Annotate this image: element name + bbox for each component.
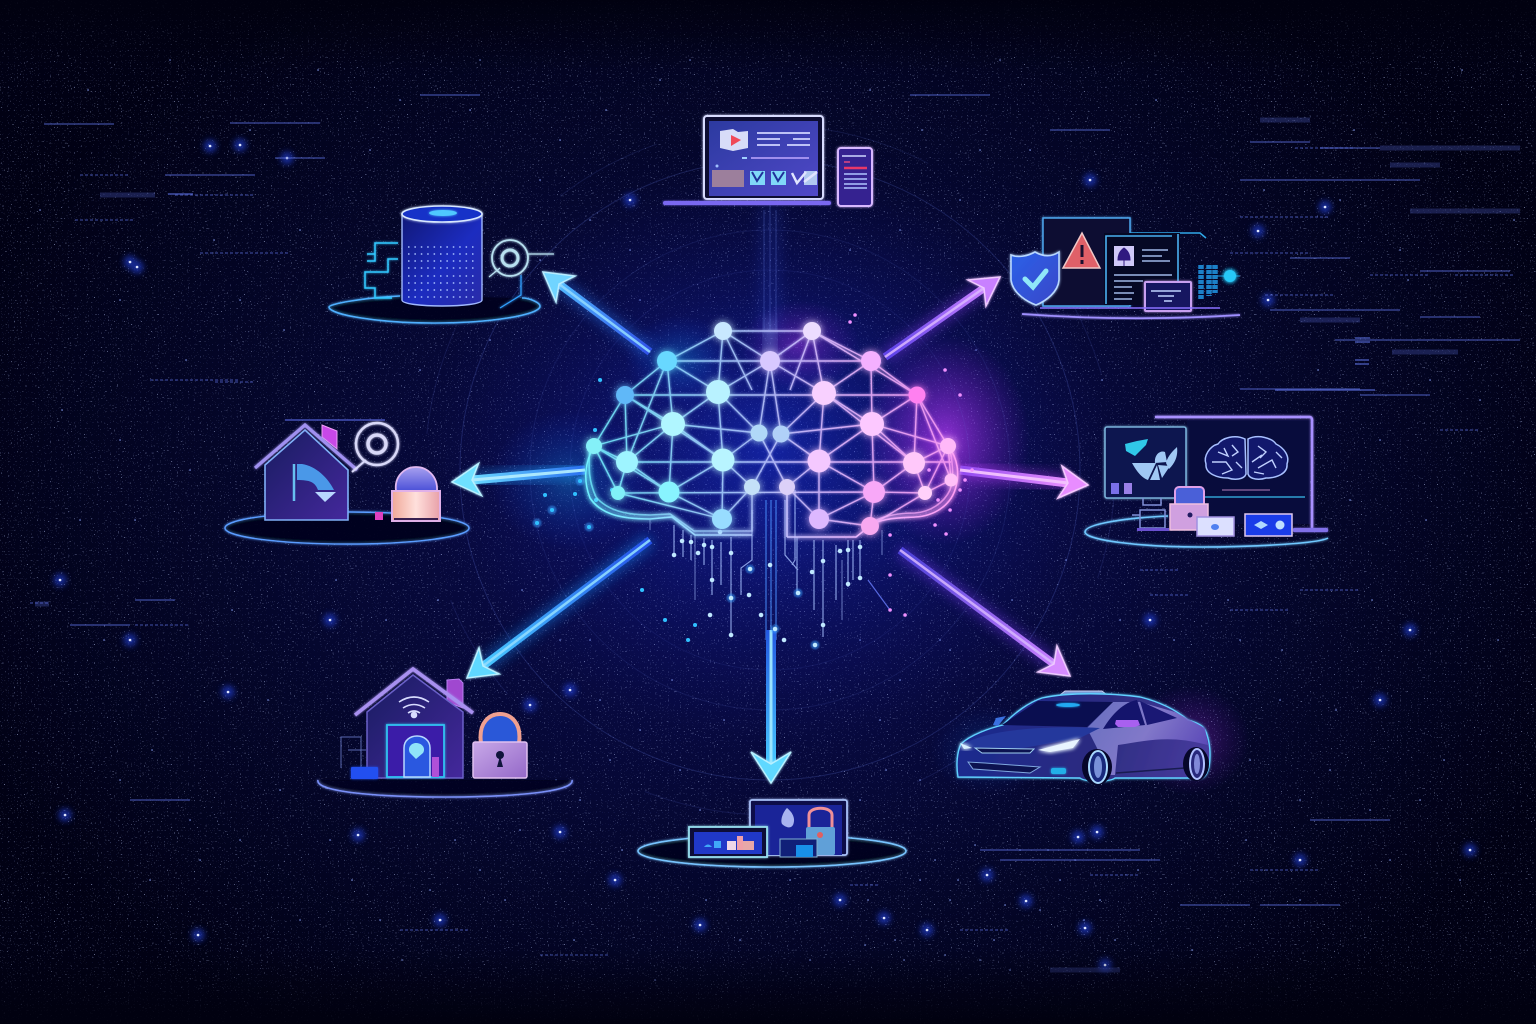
chimney: [322, 425, 337, 449]
brain scan: [1205, 437, 1288, 479]
speaker grille: [408, 247, 475, 297]
platform: [318, 780, 572, 797]
icon: security dashboard: [1011, 218, 1240, 318]
video tile: [720, 129, 748, 151]
padlock: [809, 808, 832, 828]
brain network: [586, 322, 958, 537]
lock: [396, 467, 437, 491]
brain outline: [586, 446, 958, 537]
big monitor: [1187, 420, 1310, 524]
side panel highlight: [1087, 702, 1208, 775]
platform: [225, 512, 469, 544]
arrow: to bottom devices: [751, 500, 791, 783]
orbit rings: [425, 125, 1115, 815]
circuit traces: [365, 243, 398, 298]
icon: car: [940, 691, 1250, 789]
icon: analytics screens: [1085, 417, 1328, 547]
outline boxes: [341, 737, 366, 768]
small cards: [1197, 517, 1234, 536]
brain circuit drips: [650, 490, 890, 637]
back panel: [1043, 218, 1130, 306]
padlock: [481, 714, 519, 743]
phone: [838, 148, 872, 206]
side windows: [1103, 700, 1145, 729]
large screen: [750, 800, 847, 855]
arrow: to secured home: [467, 540, 650, 678]
target sensor: [352, 423, 398, 472]
wheels: [1082, 749, 1112, 785]
windshield: [1002, 701, 1113, 727]
image tile and checks: [712, 170, 744, 187]
shield: [1011, 252, 1059, 305]
warning triangle: [1063, 233, 1100, 268]
text lines: [757, 133, 810, 145]
icon: smart home with lock: [225, 420, 469, 544]
icon: secured house: [318, 669, 572, 797]
laptop base: [663, 201, 831, 205]
neurons: [586, 322, 958, 535]
status dot: [1217, 275, 1240, 277]
target sensor: [489, 240, 554, 308]
arrow: to analytics screens: [960, 466, 1088, 498]
stand and base: [1132, 498, 1165, 528]
small card: [1145, 282, 1191, 311]
lock: [1175, 487, 1204, 507]
chimney: [447, 679, 463, 708]
speaker body: [402, 214, 482, 306]
house body: [367, 675, 463, 778]
square badge: [375, 512, 383, 520]
roof rack: [1060, 691, 1107, 695]
brain edges: [594, 331, 951, 526]
house: [265, 430, 348, 520]
platform: [329, 296, 540, 323]
headlights: [1038, 739, 1080, 752]
small card: [780, 839, 817, 857]
left monitor: [1105, 427, 1186, 498]
icon: laptop and phone: [663, 116, 872, 206]
icon: bottom device cluster: [638, 800, 906, 867]
arrow: to smart home left: [452, 464, 585, 496]
car body: [957, 694, 1210, 781]
pipe symbol: [297, 464, 334, 490]
laptop screen: [704, 116, 823, 199]
ground line: [940, 788, 1250, 790]
grille: [975, 748, 1034, 753]
floor lines: [1040, 307, 1220, 309]
blue box: [351, 767, 378, 779]
platform ring: [1085, 516, 1328, 547]
central glows: [430, 160, 1250, 795]
mirror: [993, 716, 1006, 726]
circuit end nodes: [537, 315, 972, 645]
arrow: to security dashboard: [885, 277, 1000, 357]
vertical light beam: [758, 205, 782, 370]
document panel: [1104, 233, 1180, 305]
lower line: [1116, 768, 1185, 773]
level bars: [1201, 265, 1215, 300]
arrow: to car: [900, 550, 1070, 676]
door: [387, 725, 444, 777]
small screen: [689, 827, 767, 857]
icon: smart speaker: [329, 206, 554, 323]
platform: [638, 835, 906, 867]
wifi symbol: [399, 697, 429, 718]
arrow: to smart speaker: [543, 272, 650, 352]
